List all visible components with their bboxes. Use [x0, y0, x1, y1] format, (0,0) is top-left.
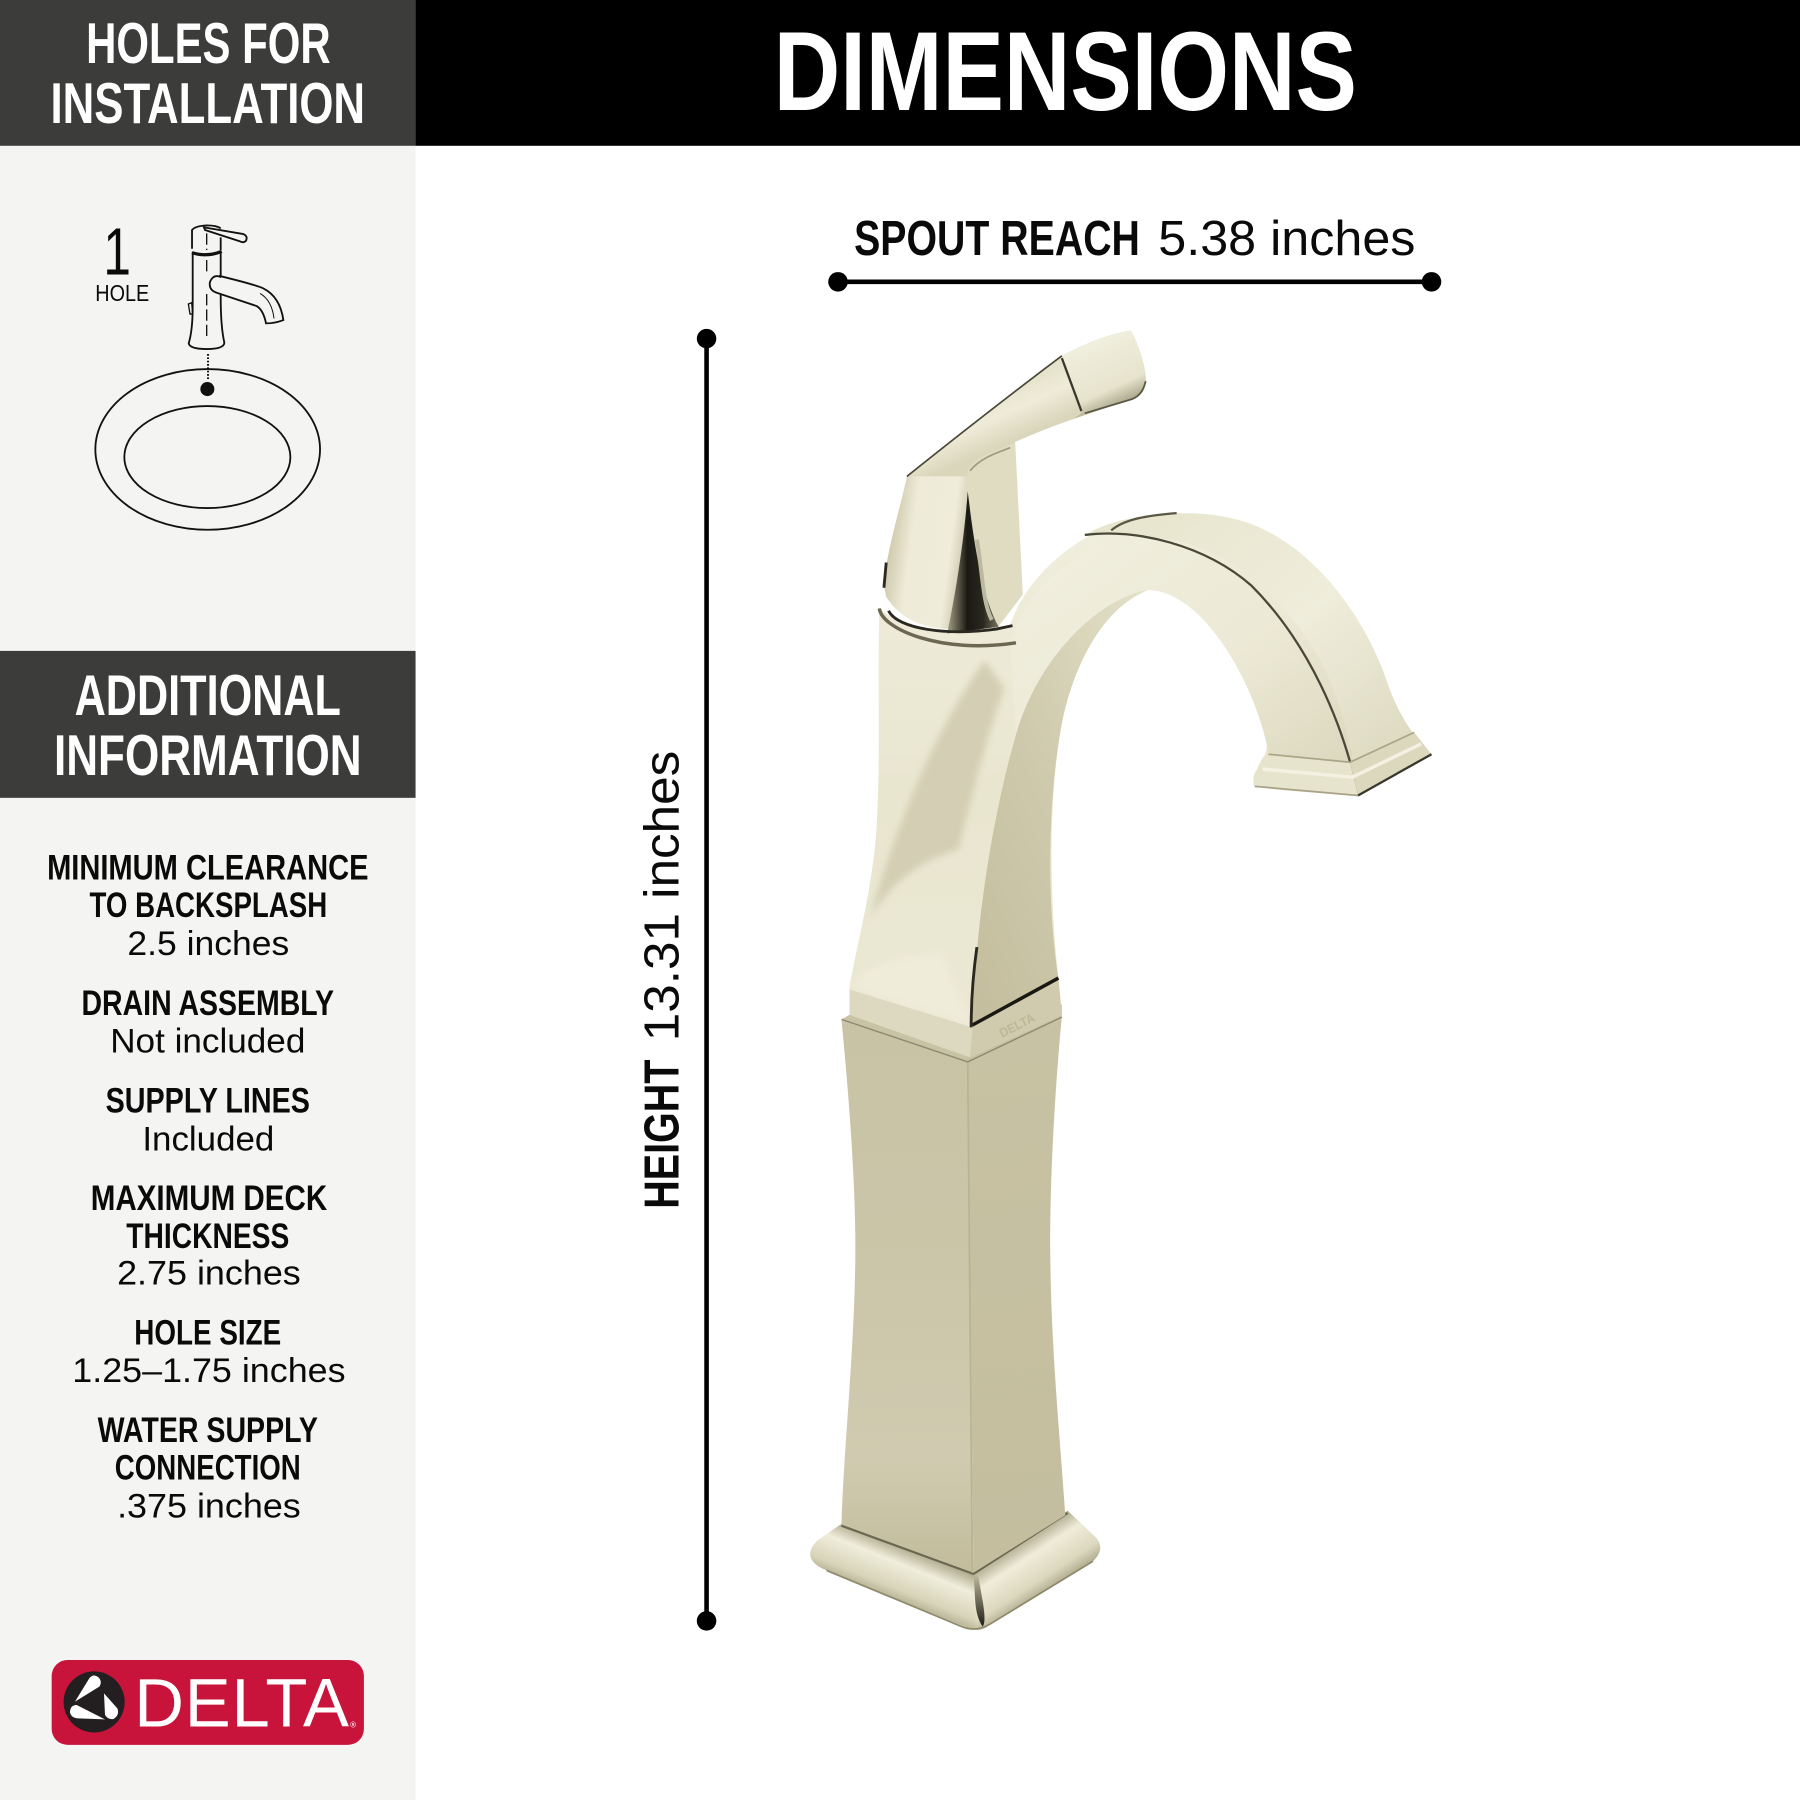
spec: hole size: HOLE SIZE: [134, 1312, 281, 1352]
spec: supply lines: Included: [142, 1120, 274, 1158]
specifications list: [47, 847, 368, 1526]
heading: additional information: INFORMATION: [54, 724, 362, 788]
spec: water supply connection: [98, 1410, 318, 1526]
spec: supply lines: SUPPLY LINES: [106, 1080, 310, 1120]
icon: one hole faucet and sink diagram: [95, 225, 320, 530]
spec: minimum clearance: [47, 847, 368, 963]
spec: maximum deck thickness: MAXIMUM DECK: [91, 1178, 327, 1218]
spec: maximum deck thickness: 2.75 inches: [117, 1255, 301, 1293]
spec: hole size: [72, 1312, 346, 1390]
icon: sink bowl: [95, 354, 320, 530]
spec: water supply connection: WATER SUPPLY: [98, 1410, 318, 1450]
dimension: height: 13.31 inches: [634, 751, 689, 1041]
spec: drain assembly: Not included: [110, 1023, 305, 1061]
heading: holes for installation: INSTALLATION: [51, 72, 365, 136]
heading: holes for installation: [0, 0, 416, 146]
dimension: spout reach: [828, 211, 1441, 292]
faucet: lower column: [841, 1004, 1065, 1573]
spec: minimum clearance: TO BACKSPLASH: [90, 885, 327, 925]
dimension: height: [634, 329, 716, 1631]
faucet illustration: [810, 331, 1432, 1630]
dimension: spout reach: SPOUT REACH: [854, 211, 1140, 266]
icon: delta triangle mark: [70, 1676, 118, 1719]
title banner: [416, 0, 1800, 146]
label: 1 hole: HOLE: [95, 280, 149, 306]
icon: faucet line drawing: [188, 225, 283, 349]
logo: delta: [52, 1660, 364, 1745]
faucet: collar ring: [879, 608, 1016, 646]
spec: drain assembly: [82, 983, 334, 1061]
faucet: base plate: [810, 1511, 1100, 1630]
sidebar background: [0, 0, 416, 1800]
logo: delta: DELTA: [134, 1665, 349, 1742]
spec: maximum deck thickness: THICKNESS: [126, 1216, 289, 1256]
spec: hole size: 1.25–1.75 inches: [72, 1352, 346, 1390]
spec: minimum clearance: MINIMUM CLEARANCE: [47, 847, 368, 887]
text: engraved delta mark: DELTA: [997, 1011, 1037, 1040]
heading: holes for installation: HOLES FOR: [86, 12, 331, 76]
spec: water supply connection: .375 inches: [117, 1488, 301, 1526]
faucet: neck and arched spout: [841, 513, 1432, 1062]
spec: minimum clearance: 2.5 inches: [127, 925, 289, 963]
dimension: spout reach: 5.38 inches: [1158, 211, 1415, 266]
spec: drain assembly: DRAIN ASSEMBLY: [82, 983, 334, 1023]
title: dimensions: DIMENSIONS: [774, 8, 1357, 134]
spec: supply lines: [106, 1080, 310, 1158]
faucet: spout foot molding: [1253, 753, 1358, 796]
spec: maximum deck thickness: [91, 1178, 327, 1293]
spec: water supply connection: CONNECTION: [115, 1448, 301, 1488]
label: 1 hole: 1: [103, 215, 131, 289]
faucet: lever handle: [884, 331, 1146, 634]
faucet: skirt below neck: [849, 990, 972, 1057]
heading: additional information: ADDITIONAL: [75, 664, 341, 728]
heading: additional information: [0, 651, 416, 798]
label: 1 hole: [95, 215, 149, 306]
dimension: height: HEIGHT: [634, 1060, 689, 1209]
logo: delta: ®: [350, 1721, 356, 1730]
